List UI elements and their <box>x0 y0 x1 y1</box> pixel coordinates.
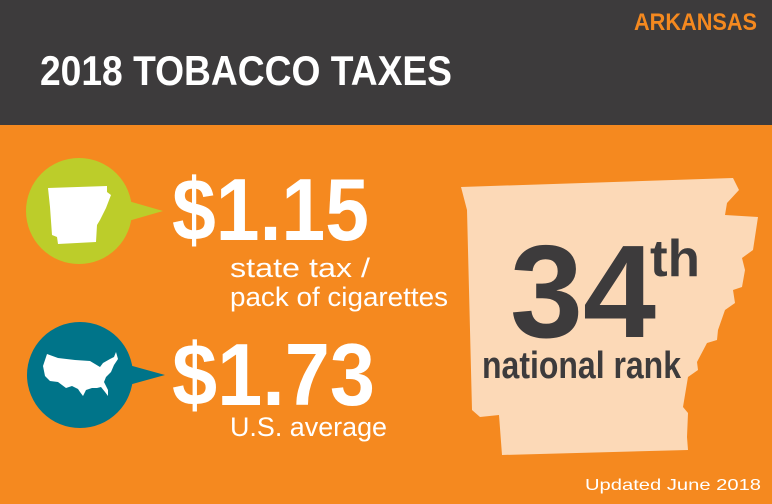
orange background <box>0 125 772 504</box>
text: state tax / pack of cigarettes <box>230 253 448 312</box>
rank number 34th: th <box>650 230 700 288</box>
text: state tax / pack of cigarettes: pack of cigarettes <box>230 282 448 312</box>
header band <box>0 0 772 125</box>
footer: updated: Updated June 2018 <box>585 477 761 494</box>
icon: USA in teal bubble <box>27 322 165 428</box>
map: Arkansas rank <box>461 178 758 455</box>
text: U.S. average: U.S. average <box>230 412 387 442</box>
stat: $1.15: $1.15 <box>172 160 369 259</box>
label: ARKANSAS: ARKANSAS <box>634 9 757 36</box>
text: state tax / pack of cigarettes: state tax / <box>230 253 371 283</box>
icon: Arkansas in green bubble <box>26 158 163 264</box>
rank number 34th: 34 <box>510 218 656 365</box>
title: 2018 TOBACCO TAXES <box>40 47 452 94</box>
text: national rank: national rank <box>482 345 682 387</box>
stat: $1.73: $1.73 <box>172 325 375 424</box>
